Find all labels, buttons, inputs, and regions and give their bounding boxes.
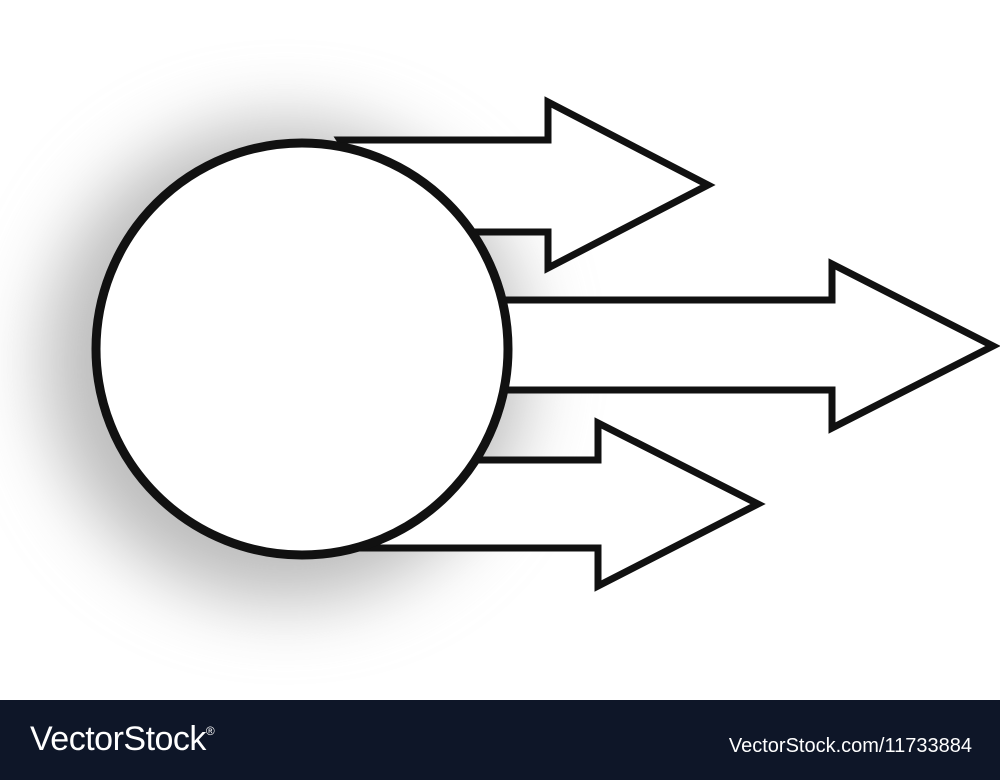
arrow: bottom <box>360 423 758 586</box>
brand logo text: VectorStock® <box>30 720 214 758</box>
image url text: VectorStock.com/11733884 <box>729 735 972 757</box>
arrow: top <box>340 102 708 268</box>
footer bar <box>0 700 1000 780</box>
arrow: middle <box>420 264 993 428</box>
shadow behind circle <box>45 122 525 602</box>
central circle <box>96 143 508 555</box>
